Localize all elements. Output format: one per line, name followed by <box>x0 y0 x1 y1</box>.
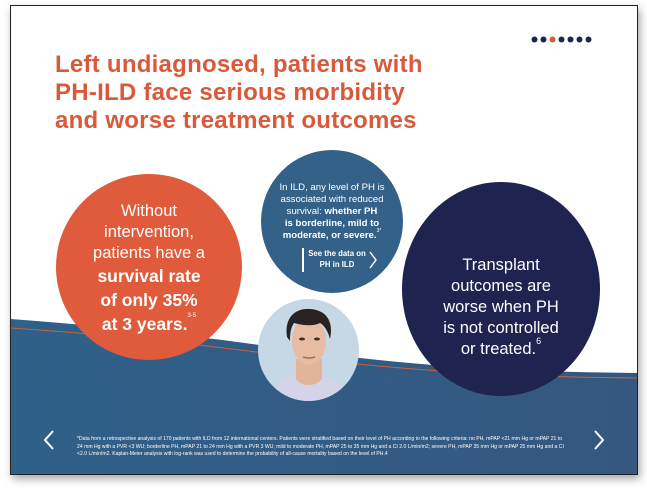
title: PH-ILD face serious morbidity <box>55 79 405 106</box>
circle: any level of PH: In ILD, any level of PH is <box>279 182 385 193</box>
circle: any level of PH: associated with reduced <box>281 194 383 205</box>
circle: transplant outcomes: is not controlled <box>443 319 559 337</box>
circle: survival rate: of only 35% <box>100 290 198 310</box>
circle: survival rate <box>56 174 242 360</box>
link: see the data: See the data on <box>308 249 366 258</box>
link: see the data: PH in ILD <box>320 260 354 269</box>
title: and worse treatment outcomes <box>55 107 417 134</box>
circle: survival rate: survival rate <box>97 266 201 286</box>
icon: chevron <box>370 252 377 268</box>
circle: survival rate: Without <box>121 202 177 220</box>
circle: transplant outcomes: worse when PH <box>443 298 559 316</box>
circle: any level of PH: survival: whether PH <box>287 206 377 217</box>
link: see the data <box>302 248 368 272</box>
circle: survival rate: patients have a <box>93 244 205 262</box>
arrow: next <box>594 430 604 450</box>
circle: survival rate: intervention, <box>104 223 194 241</box>
circle: any level of PH: moderate, or severe.3* <box>283 228 381 241</box>
photo: patient <box>258 299 359 401</box>
circle: transplant outcomes: or treated.6 <box>461 336 541 358</box>
title <box>55 51 423 134</box>
title: Left undiagnosed, patients with <box>55 51 423 78</box>
circle: any level of PH: is borderline, mild to <box>285 218 379 229</box>
circle: any level of PH <box>261 150 403 293</box>
arrow: previous <box>44 430 54 450</box>
circle: transplant outcomes <box>402 182 600 396</box>
circle: transplant outcomes: Transplant <box>462 256 540 274</box>
pagination dots <box>532 36 592 42</box>
circle: survival rate: at 3 years.3-5 <box>102 313 196 334</box>
circle: transplant outcomes: outcomes are <box>451 277 551 295</box>
footnote: *Data from a retrospective analysis of 170 patients with ILD from 12 international centers. Patients were stratified based on their level of PH according to the following criteria: no PH, mPAP <21 mm Hg or mPAP 21 to 24 mm Hg with a PVR <3 WU; borderline PH, mPAP 21 to 24 mm Hg with a PVR 3 WU; mild to moderate PH, mPAP 25 to 35 mm Hg and a CI 2.0 L/min/m2; severe PH, mPAP 35 mm Hg or mPAP 25 mm Hg and a CI <2.0 L/min/m2. Kaplan-Meier analysis with log-rank was used to determine the probability of all-cause mortality based on the level of PH.4 <box>77 436 564 457</box>
